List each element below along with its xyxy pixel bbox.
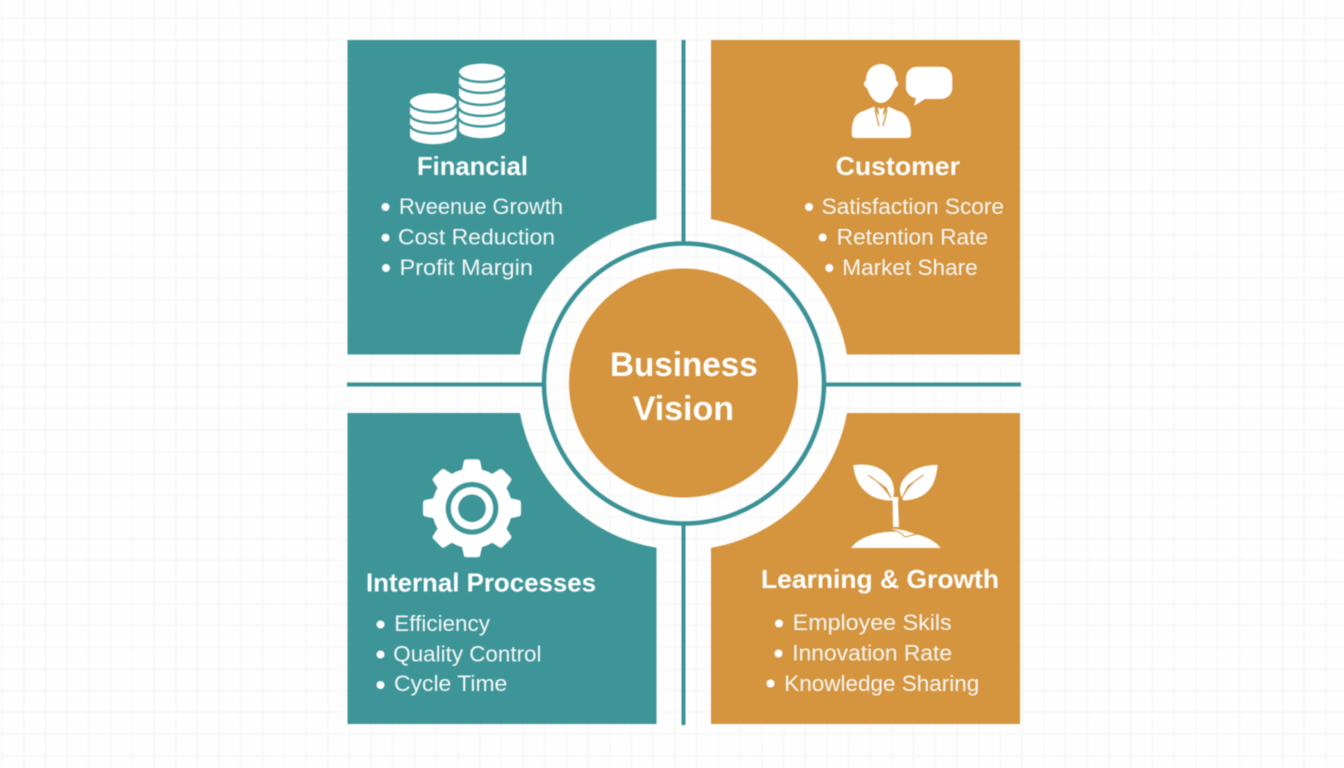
list: process measures: Efficiency xyxy=(394,611,490,636)
list: learning measures: Employee Skils xyxy=(793,610,952,635)
list: learning measures: Innovation Rate xyxy=(792,641,952,666)
list: process measures: Quality Control xyxy=(393,642,542,667)
list: customer measures: Satisfaction Score xyxy=(822,194,1004,219)
icon: gear xyxy=(423,459,521,557)
list: learning measures: Knowledge Sharing xyxy=(784,671,979,696)
panel: financial xyxy=(348,40,656,354)
list: process measures xyxy=(376,611,542,696)
heading: Learning & Growth: Learning & Growth xyxy=(761,564,999,594)
list: financial measures: Cost Reduction xyxy=(398,225,555,250)
panel: learning and growth xyxy=(711,413,1020,724)
list: customer measures xyxy=(805,194,1004,280)
center circle: Business Vision: Business xyxy=(610,346,758,384)
icon: sprout xyxy=(851,465,941,548)
heading: Customer: Customer xyxy=(836,151,960,181)
icon: coin stacks xyxy=(410,64,505,144)
list: financial measures: Rveenue Growth xyxy=(399,194,563,219)
list: financial measures xyxy=(382,194,563,280)
list: process measures: Cycle Time xyxy=(394,671,507,696)
list: learning measures xyxy=(766,610,979,696)
outer ring xyxy=(544,244,824,524)
connector lines xyxy=(347,40,1021,725)
panel: customer xyxy=(711,40,1020,354)
heading: Financial: Financial xyxy=(417,151,528,181)
center circle: Business Vision: Vision xyxy=(633,390,734,428)
center circle: Business Vision xyxy=(569,268,798,498)
list: customer measures: Retention Rate xyxy=(837,225,988,250)
heading: Internal Processes: Internal Processes xyxy=(366,568,596,598)
list: financial measures: Profit Margin xyxy=(400,255,533,280)
panel: internal processes xyxy=(348,413,656,724)
list: customer measures: Market Share xyxy=(842,255,978,280)
icon: person with speech bubble xyxy=(852,64,952,138)
